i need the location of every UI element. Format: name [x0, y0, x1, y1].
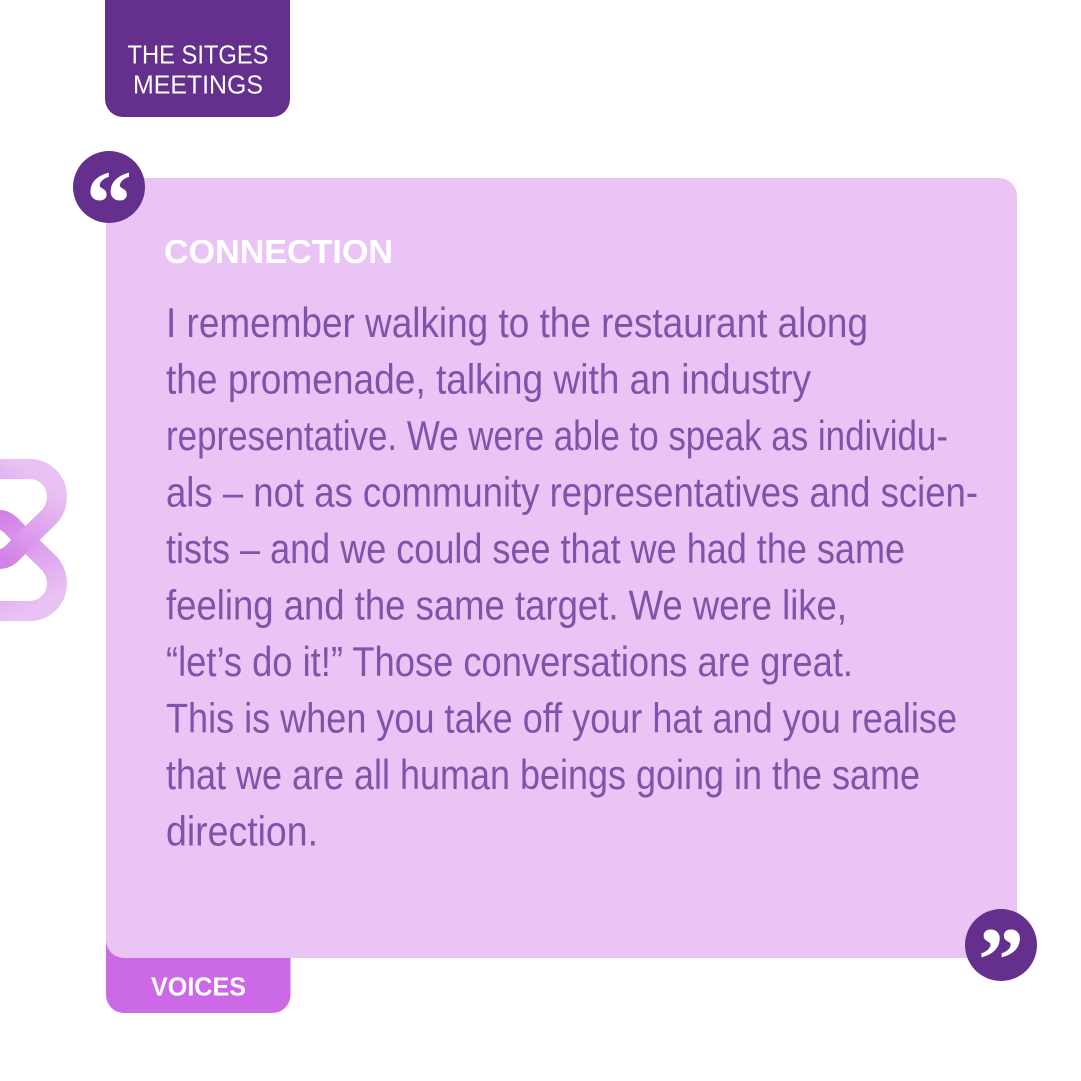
icon: opening quote	[73, 151, 145, 254]
quote text: tists – and we could see that we had the same	[166, 525, 905, 572]
icon: closing quote	[965, 909, 1037, 1011]
quote text: This is when you take off your hat and you realise	[166, 694, 957, 742]
quote text: I remember walking to the restaurant along	[166, 299, 868, 346]
quote text: feeling and the same target. We were like,	[166, 582, 847, 628]
quote text	[166, 299, 978, 854]
quote text: the promenade, talking with an industry	[166, 356, 811, 402]
quote text: “let’s do it!” Those conversations are great.	[166, 638, 853, 685]
logo mark: interlaced loops	[0, 469, 57, 611]
panel: quote card	[106, 178, 1017, 958]
quote text: representative. We were able to speak as individu-	[166, 412, 948, 459]
quote text: that we are all human beings going in the same	[166, 751, 920, 798]
tab: voices	[106, 930, 290, 1013]
tab: voices: VOICES	[151, 972, 246, 1002]
quote text: direction.	[166, 808, 318, 854]
heading: connection: CONNECTION	[164, 233, 393, 270]
tab: the sitges meetings: THE SITGES	[128, 40, 268, 70]
quote text: als – not as community representatives and scien-	[166, 468, 978, 516]
tab: the sitges meetings: MEETINGS	[133, 70, 263, 100]
tab: the sitges meetings	[105, 0, 290, 117]
icon: closing quote: ”	[978, 909, 1024, 1011]
icon: opening quote: “	[86, 152, 132, 254]
